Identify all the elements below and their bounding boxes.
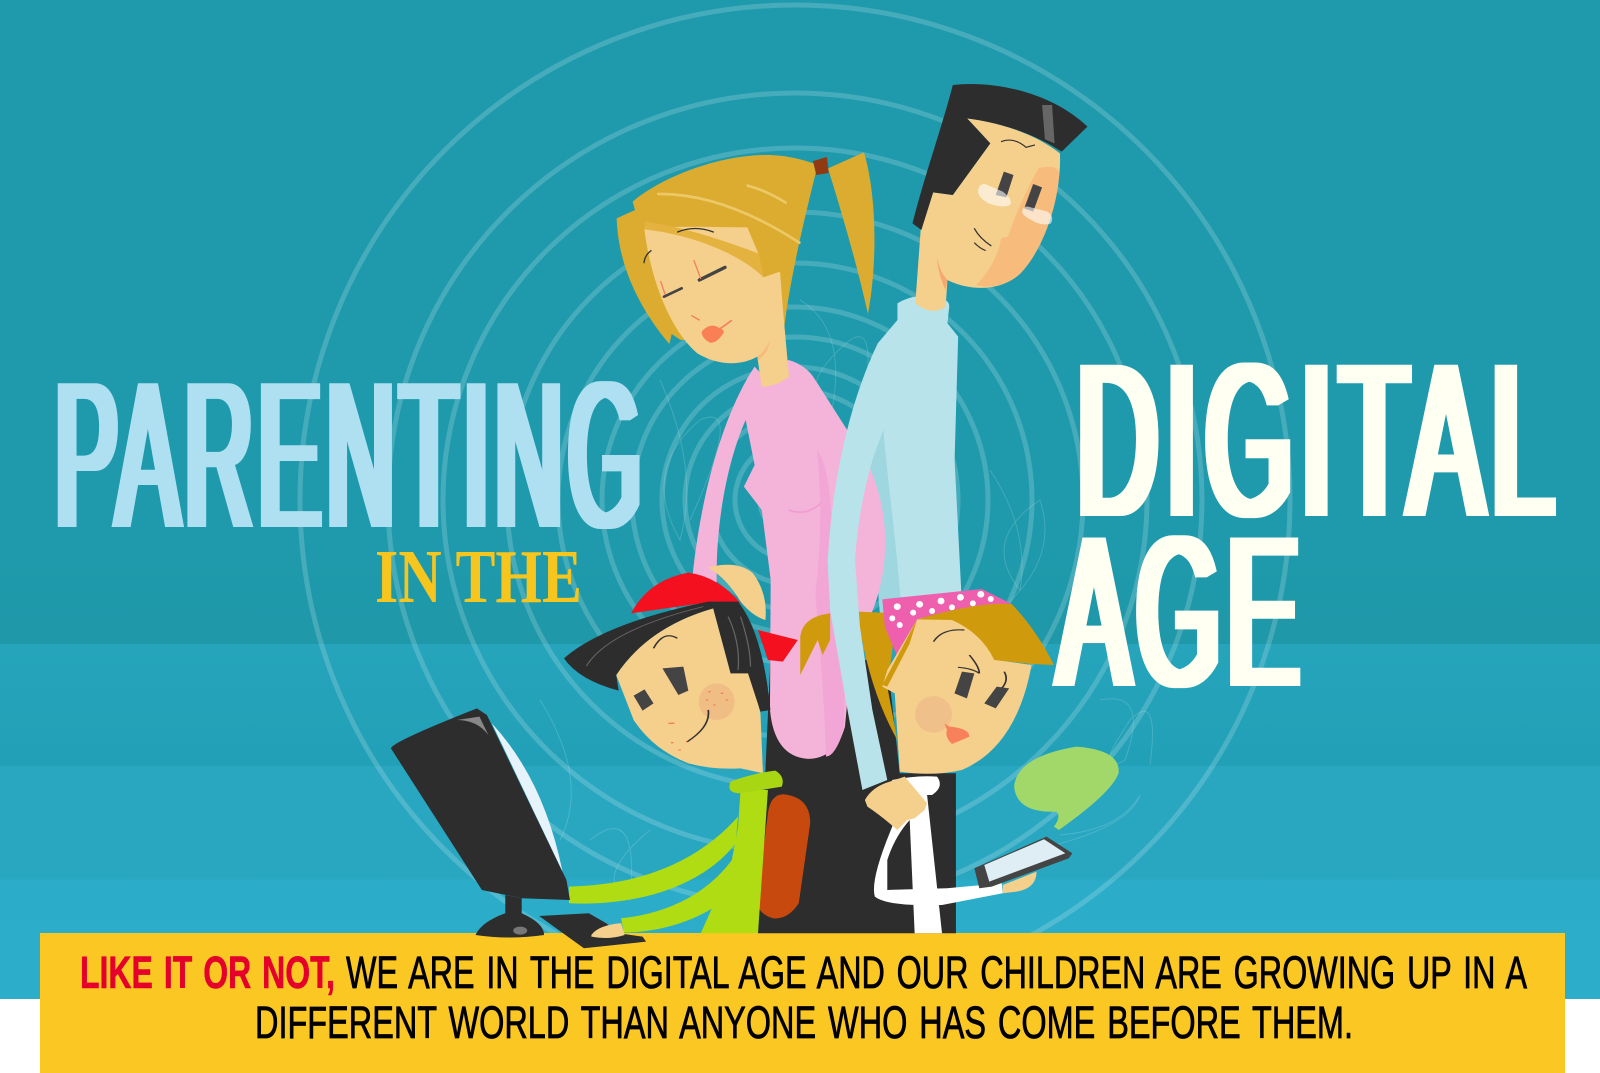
girl lines (934, 630, 1006, 688)
tablet screen (984, 839, 1065, 882)
father shirt (878, 297, 964, 633)
mother chest crease (789, 503, 821, 512)
boy (564, 573, 810, 933)
father head (912, 84, 1087, 311)
thin background scribbles (450, 300, 1152, 900)
bandana dots (889, 591, 994, 628)
speech bubble (1014, 747, 1119, 830)
father eyes (996, 172, 1042, 212)
mother features (644, 186, 799, 360)
mother fringe (644, 222, 763, 277)
boy arm upper (569, 817, 738, 904)
mother head (617, 152, 874, 387)
boy hair lines (586, 607, 751, 670)
computer (391, 708, 646, 948)
girl cheek (915, 696, 952, 733)
boy hand (591, 923, 625, 938)
boy cap (631, 573, 798, 662)
boy face (616, 608, 763, 773)
monitor (391, 708, 570, 900)
father shirt shade (869, 392, 903, 633)
mother ponytail (828, 152, 874, 314)
mother body (744, 360, 885, 759)
girl eyes (954, 672, 1009, 708)
girl bandana (882, 589, 1012, 657)
father torso (869, 297, 964, 633)
monitor screen (492, 723, 562, 872)
yellow banner (40, 933, 1565, 1073)
mother hand (708, 565, 766, 620)
father glasses (978, 184, 1052, 224)
father hair highlight (1042, 105, 1055, 143)
boy sweater (701, 790, 768, 933)
tablet (974, 837, 1072, 888)
girl shirt (874, 776, 1003, 933)
father neck shade (937, 257, 947, 290)
boy freckles (668, 692, 728, 750)
infographic canvas: PARENTING (55, 339, 647, 572)
father hair (912, 84, 1087, 230)
monitor stand (475, 895, 544, 937)
family dark legs (758, 660, 956, 933)
boy cheek (699, 683, 735, 720)
boy hair (564, 602, 770, 712)
father lower arm (828, 560, 887, 790)
boy backpack (757, 794, 810, 918)
boy smile (654, 636, 708, 742)
girl hand (1003, 872, 1037, 893)
mother (693, 360, 885, 759)
monitor highlight (457, 717, 488, 735)
mother body shade (815, 450, 846, 757)
father neck and face (915, 118, 1060, 311)
mother hair tie (813, 157, 829, 175)
mother face and neck (644, 227, 789, 387)
mouse pad (539, 913, 646, 948)
title: in the: IN THE (375, 535, 582, 619)
father facial lines (974, 140, 1035, 251)
boy collar (729, 771, 783, 793)
stand dot (513, 927, 527, 935)
girl lips (944, 723, 969, 744)
mother arm (693, 367, 764, 600)
girl fringe (882, 604, 1054, 687)
father hand (865, 777, 927, 830)
boy arm lower (621, 858, 751, 933)
father face shade (976, 167, 1059, 286)
banner highlighted text: LIKE IT OR NOT, (80, 947, 335, 998)
boy eyes (634, 667, 688, 711)
mother hair (617, 155, 818, 344)
title: age: AGE (1058, 493, 1306, 731)
girl hair back (800, 612, 897, 740)
father upper arm (828, 343, 917, 560)
girl (800, 589, 1119, 933)
girl face (882, 618, 1032, 774)
concentric rings (300, 5, 1290, 995)
